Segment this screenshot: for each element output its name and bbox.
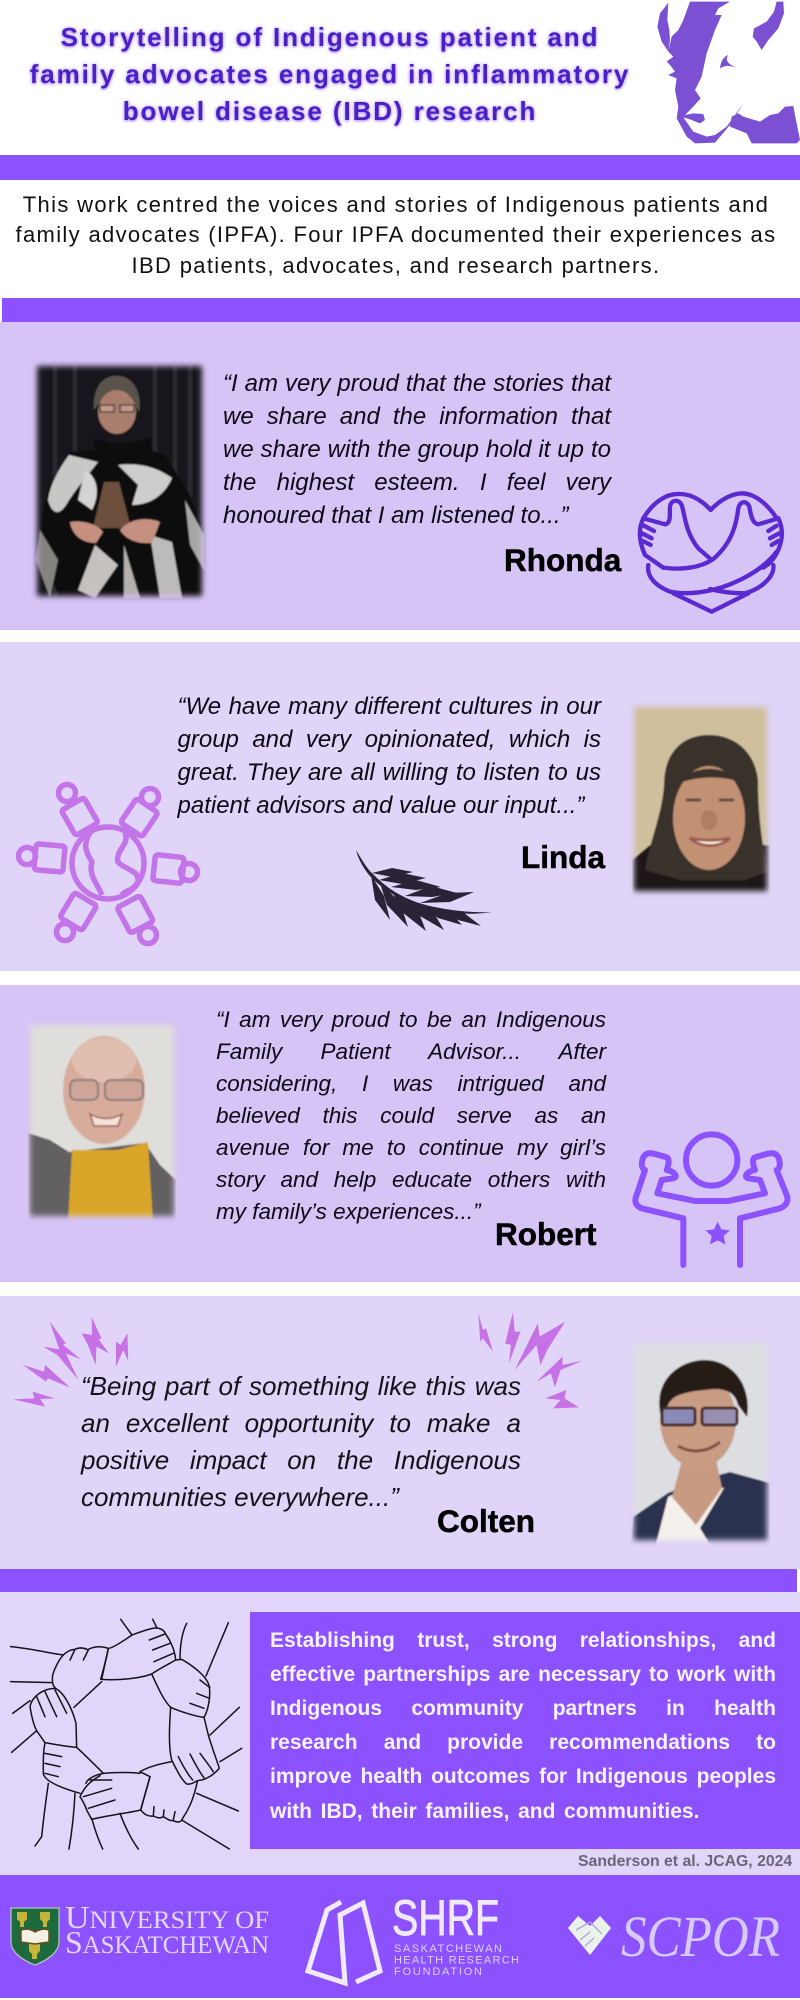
logo: SHRF: FOUNDATION [394, 1966, 482, 1978]
logo: SHRF [308, 1890, 519, 1983]
quote: Colten [80, 1370, 521, 1512]
quote: Rhonda: we share with the group hold it up to [223, 436, 611, 463]
logo: SCPOR: SCPOR [621, 1904, 780, 1969]
title: Storytelling of Indigenous patient and [61, 22, 599, 52]
photo: Linda [625, 700, 775, 900]
logo: SCPOR [568, 1904, 780, 1969]
photo: Colten [631, 1341, 770, 1544]
intro text [16, 192, 776, 278]
name: Rhonda: Rhonda [504, 542, 621, 578]
name: Linda: Linda [521, 839, 605, 875]
name: Robert: Robert [495, 1216, 596, 1252]
logo: SHRF: SASKATCHEWAN [394, 1943, 502, 1955]
quote: Robert: Family Patient Advisor... After [216, 1039, 606, 1064]
title [28, 22, 630, 128]
conclusion text: effective partnerships are necessary to work with [270, 1663, 776, 1686]
conclusion text [270, 1629, 776, 1823]
logo: SHRF: HEALTH RESEARCH [394, 1954, 519, 1966]
panel: Robert [0, 985, 800, 1282]
quote: Linda: patient advisors and value our input...” [178, 792, 584, 819]
quote: Linda: great. They are all willing to listen to us [178, 759, 601, 786]
top band [0, 155, 800, 180]
icon: person raising arms with star [635, 1134, 788, 1265]
photo: Robert [28, 1024, 176, 1220]
conclusion box [250, 1612, 800, 1849]
intro text: This work centred the voices and stories of Indigenous patients and [23, 192, 769, 216]
name: Colten: Colten [437, 1503, 535, 1539]
quote: Colten: “Being part of something like this was [81, 1370, 521, 1400]
quote: Linda: “We have many different cultures in our [178, 693, 601, 720]
conclusion text: research and provide recommendations to [270, 1731, 776, 1754]
icon: left lightning burst [13, 1317, 128, 1407]
conclusion text: Establishing trust, strong relationships, and [270, 1629, 776, 1652]
logo: University of Saskatchewan [11, 1899, 269, 1965]
second band [2, 298, 800, 322]
quote: Colten: positive impact on the Indigenous [81, 1444, 521, 1474]
quote: Rhonda: the highest esteem. I feel very [223, 469, 611, 496]
quote: Linda [176, 693, 602, 819]
wordmark: UNIVERSITY OF [65, 1899, 269, 1935]
quote: Robert: considering, I was intrigued and [216, 1071, 606, 1096]
panel: Linda [0, 642, 800, 971]
citation: Sanderson et al. JCAG, 2024 [578, 1852, 792, 1870]
quote: Robert: story and help educate others with [216, 1167, 606, 1192]
logo: SHRF: SHRF [392, 1890, 499, 1946]
quote: Robert: “I am very proud to be an Indigenous [216, 1007, 606, 1032]
footer with logos [0, 1875, 800, 1998]
photo: Rhonda [30, 360, 210, 605]
title: family advocates engaged in inflammatory [30, 59, 630, 89]
quote: Colten: communities everywhere...” [81, 1482, 399, 1512]
conclusion text: Indigenous community partners in health [270, 1697, 776, 1720]
conclusion text: improve health outcomes for Indigenous peoples [270, 1765, 776, 1788]
intro text: family advocates (IPFA). Four IPFA documented their experiences as [16, 222, 776, 247]
intro text: IBD patients, advocates, and research partners. [132, 252, 660, 278]
conclusion text: with IBD, their families, and communities. [270, 1800, 699, 1823]
panel: Rhonda [0, 322, 800, 630]
icon: circle of linked hands [10, 1618, 242, 1850]
icon: heart embrace [640, 493, 782, 612]
quote: Colten: an excellent opportunity to make a [81, 1408, 521, 1438]
icon: right lightning burst [478, 1313, 582, 1408]
panel: Colten [0, 1296, 800, 1569]
quote: Rhonda: honoured that I am listened to...” [223, 502, 569, 529]
logo: University of Saskatchewan: SASKATCHEWAN [65, 1924, 269, 1960]
quote: Robert [216, 1007, 607, 1224]
crest [11, 1908, 59, 1965]
quote: Robert: avenue for me to continue my girl’s [216, 1135, 606, 1160]
band above conclusion [0, 1569, 797, 1592]
icon: bison logo [657, 2, 800, 144]
panel: conclusion [0, 1592, 800, 1875]
quote: Rhonda: we share and the information that [223, 403, 611, 430]
quote: Robert: my family’s experiences...” [216, 1199, 481, 1224]
quote: Robert: believed this could serve as an [216, 1103, 606, 1128]
quote: Rhonda [223, 370, 612, 529]
SHRF mark [308, 1902, 380, 1983]
title: bowel disease (IBD) research [123, 96, 537, 126]
icon: feather leaf [356, 850, 492, 931]
quote: Linda: group and very opinionated, which is [178, 726, 601, 753]
icon: globe with people [18, 784, 198, 944]
quote: Rhonda: “I am very proud that the stories that [223, 370, 611, 397]
icon: handshake [568, 1916, 611, 1955]
